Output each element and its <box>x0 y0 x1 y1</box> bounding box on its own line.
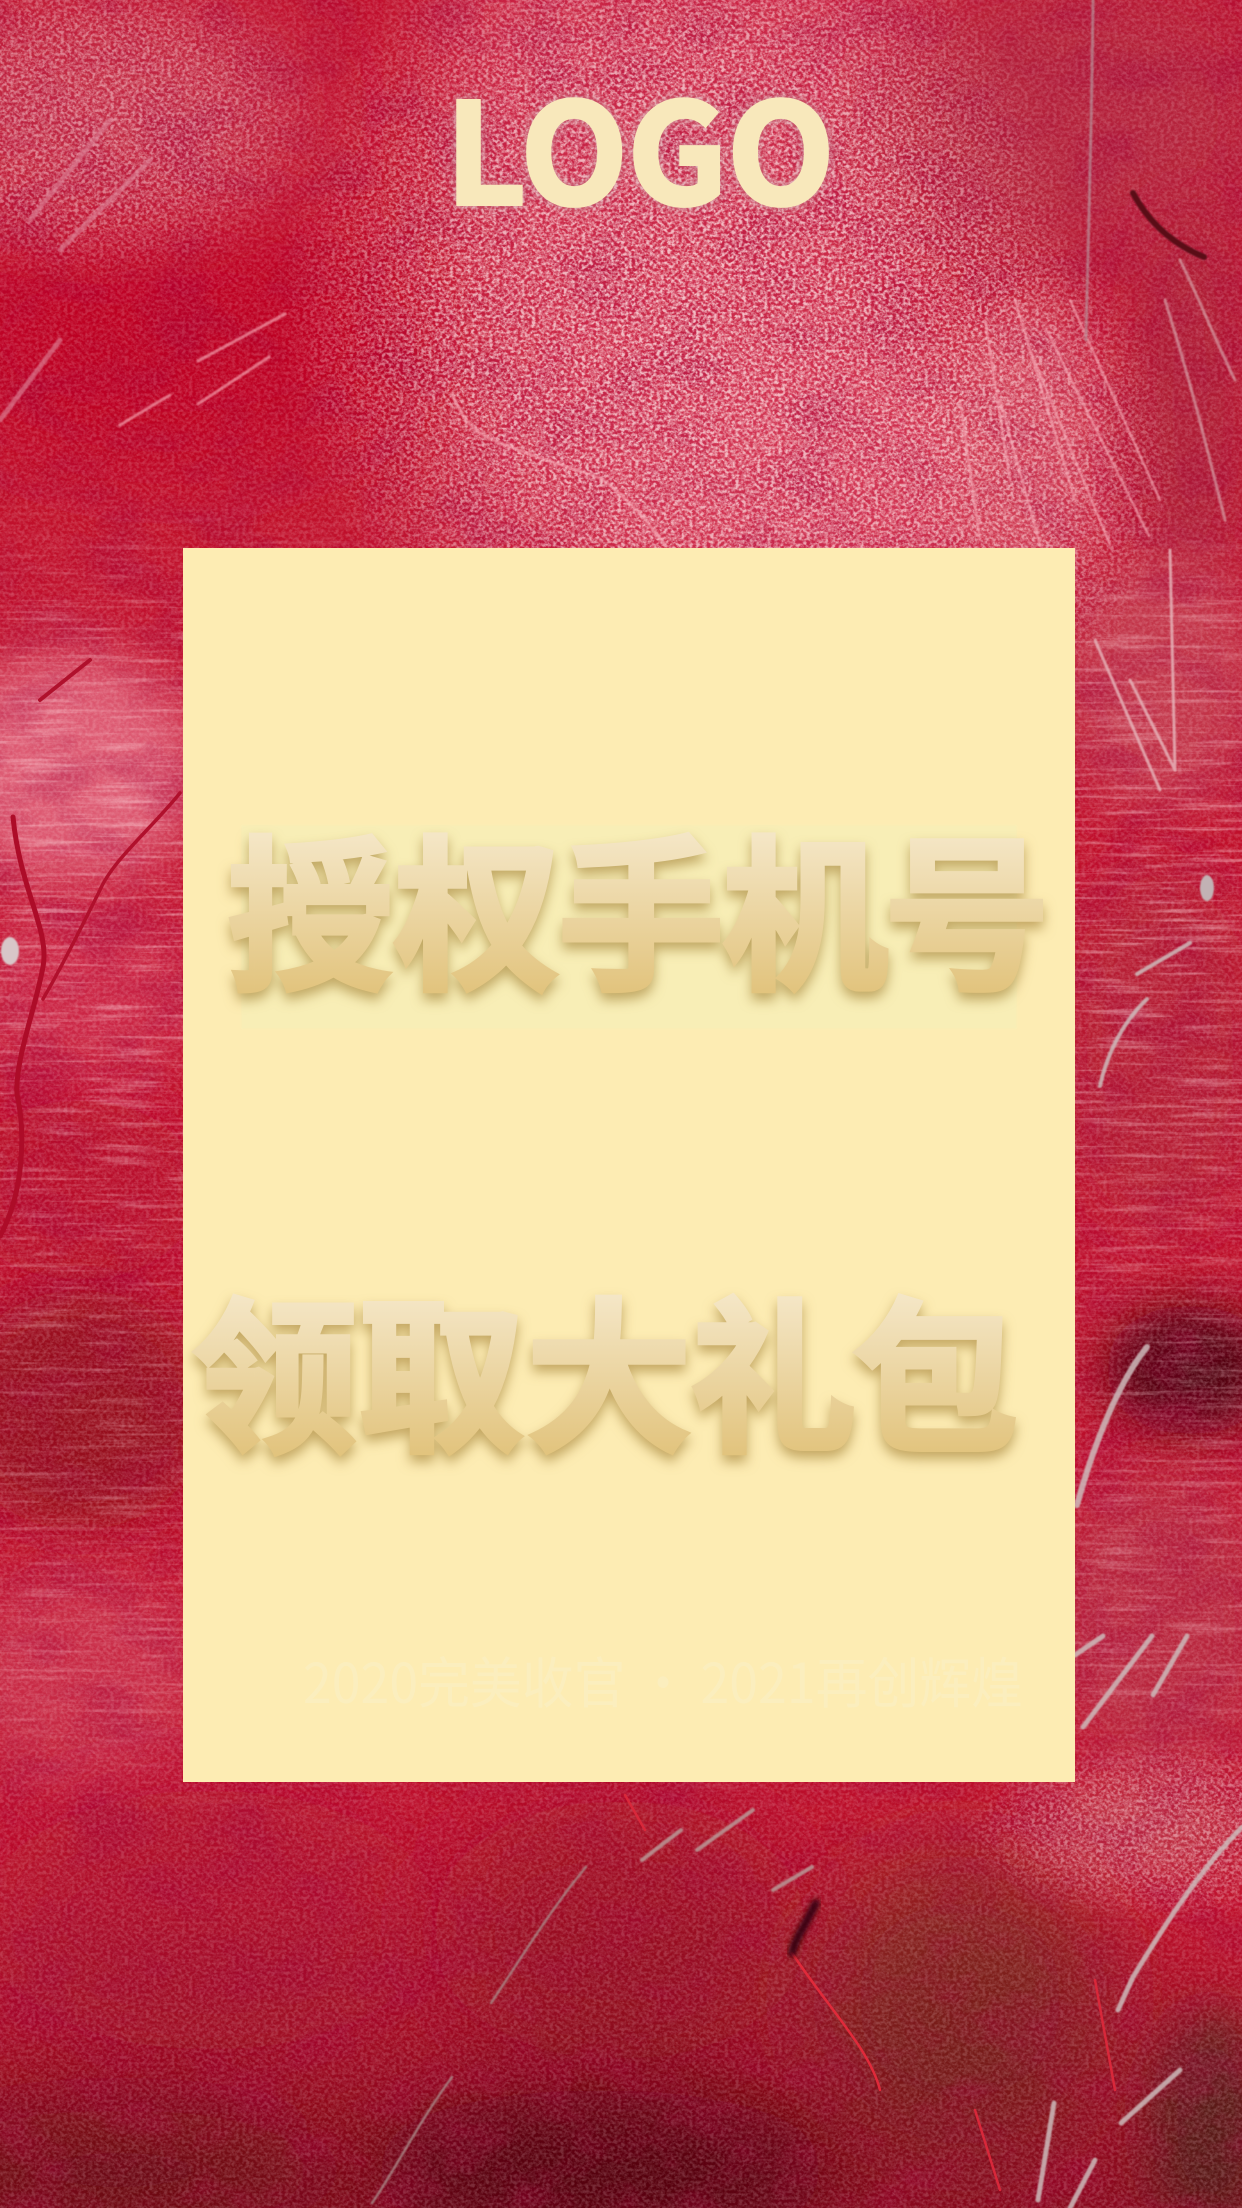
heading: 领取大礼包: 领取大礼包 <box>192 1245 1018 1486</box>
pale brush lines, top <box>0 0 1235 546</box>
panel: cream card <box>183 548 1075 1782</box>
heading: 授权手机号: 授权手机号 <box>228 783 1050 1024</box>
faint glow behind headline <box>241 825 1017 1029</box>
logo: LOGO <box>446 44 834 245</box>
faint subtitle: 2020完美收官 · 2021再创辉煌 <box>303 1639 1023 1719</box>
grey and dark brush lines, sides <box>372 550 1242 2208</box>
